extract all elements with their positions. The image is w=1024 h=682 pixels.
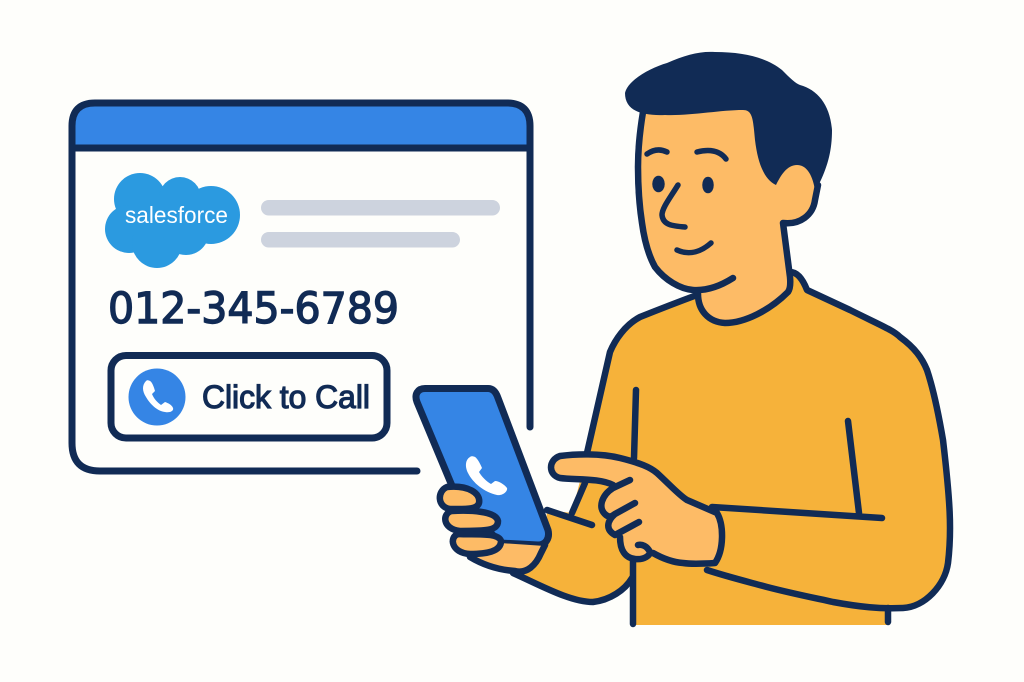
click to call button <box>111 356 387 438</box>
icon: salesforce cloud logo: salesforce <box>125 202 228 228</box>
face and neck <box>625 52 832 323</box>
panel: browser window <box>72 103 530 471</box>
person <box>416 52 950 625</box>
icon: salesforce cloud logo <box>105 173 240 268</box>
phone <box>416 388 549 545</box>
hair <box>625 52 832 190</box>
icon: phone in circle <box>128 368 186 426</box>
window frame <box>72 103 530 471</box>
placeholder text lines <box>261 200 500 248</box>
left hand holding phone <box>440 487 632 602</box>
eyebrows, eyes, nose and mouth <box>647 150 726 253</box>
phone number: 012-345-6789 <box>108 284 399 334</box>
click to call button: Click to Call <box>202 379 370 415</box>
sweater <box>513 272 950 625</box>
icon: handset on phone <box>466 456 507 495</box>
window header bar <box>72 103 530 148</box>
right hand pointing <box>551 454 722 564</box>
